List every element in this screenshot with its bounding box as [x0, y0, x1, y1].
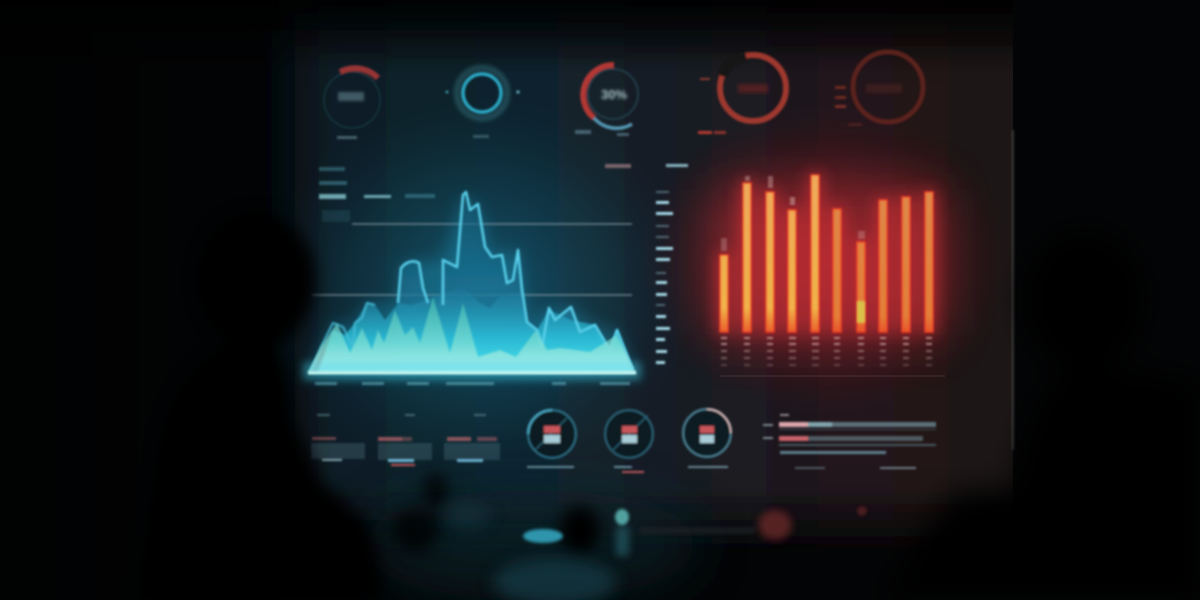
top gauges row: [324, 52, 923, 139]
gauge 5: [835, 52, 923, 126]
chart glow: [305, 195, 640, 376]
foreground bokeh lights: [446, 501, 867, 600]
bottom row: [311, 409, 936, 473]
gauge 4: [698, 55, 786, 134]
axis labels: [315, 382, 630, 385]
overall bar halo: [712, 190, 940, 335]
bar glow: [717, 172, 936, 334]
progress bars: [763, 414, 936, 469]
mint area: [308, 297, 636, 373]
edge vignette: [0, 0, 280, 600]
dashboard photo scene: [266, 17, 1016, 600]
bar highlight: [857, 301, 865, 323]
left legend labels: [656, 164, 688, 364]
gauge 3: 30%: [601, 87, 627, 102]
ring 1: [527, 410, 576, 468]
mini tables: [311, 414, 500, 466]
bar chart panel: [656, 164, 945, 376]
line chart panel: [303, 164, 641, 385]
ring 2: [605, 410, 653, 473]
gauge 1: [324, 68, 380, 139]
gauge 2: [445, 68, 520, 138]
chart heading labels: [319, 164, 631, 222]
silhouette: right person: [880, 230, 1200, 600]
cyan mid series: [318, 287, 633, 372]
baseline: [303, 362, 641, 380]
gauge 3: [575, 65, 638, 136]
bars: [720, 175, 933, 332]
desk glow: [360, 490, 700, 600]
ring 3: [683, 409, 731, 468]
grid lines: [312, 224, 632, 295]
line series: [310, 192, 633, 372]
silhouette: left person: [140, 214, 600, 600]
rear area fill: [398, 195, 633, 372]
screen panel: [284, 28, 1015, 538]
bar value labels: [721, 176, 932, 366]
